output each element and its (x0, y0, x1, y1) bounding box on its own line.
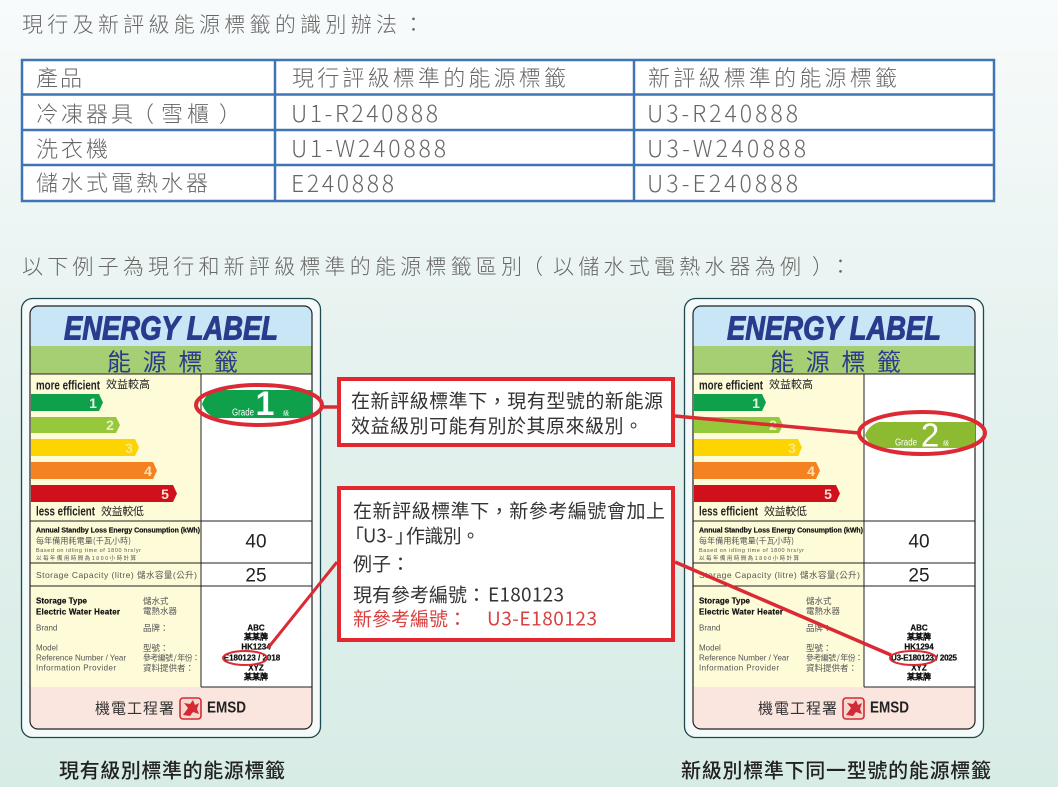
connector lines and highlight ellipses (196, 385, 985, 665)
data rows: 以每年備用時間為1800小時計算 (36, 554, 136, 562)
data rows: ABC (247, 624, 265, 632)
data rows: Reference Number / Year (36, 654, 126, 662)
data rows: Storage Type (36, 596, 88, 606)
data rows: Electric Water Heater (36, 608, 120, 616)
table: label identification: 冷凍器具 (36, 97, 133, 129)
data rows: 品牌： (806, 622, 832, 634)
table: label identification: U1-R240888 (291, 95, 438, 129)
callout: new reference number: 」 (395, 522, 414, 548)
data rows: E180123 / 2018 (224, 654, 281, 662)
data rows: XYZ (911, 664, 927, 672)
title: Chinese: 能源標籤 (107, 342, 238, 378)
grade badge: grade 2: 2 (921, 416, 939, 454)
table: label identification: 產品 (36, 61, 82, 93)
heading: example comparison: （ (522, 251, 543, 281)
title: Chinese: 能源標籤 (770, 342, 901, 378)
data rows: Information Provider (36, 664, 116, 672)
caption: new label: 新級別標準下同一型號的能源標籤 (681, 754, 991, 784)
callout: new reference number: 新參考編號： (353, 604, 467, 632)
data rows: Information Provider (699, 664, 779, 672)
data rows: Based on idling time of 1800 hrs/yr (699, 548, 804, 554)
efficiency scale: 效益較高 (769, 376, 813, 392)
data rows: 以每年備用時間為1800小時計算 (699, 554, 799, 562)
efficiency scale: 3 (125, 440, 133, 456)
data rows: 某某牌 (906, 632, 931, 642)
table: label identification: U3-R240888 (647, 95, 798, 129)
efficiency scale: 2 (769, 417, 777, 433)
table: label identification: 新評級標準的能源標籤 (648, 61, 897, 93)
efficiency scale: 1 (89, 395, 97, 411)
data rows (36, 528, 281, 682)
data rows: 儲水式 (806, 595, 832, 607)
callout: new reference number: E180123 (488, 580, 564, 608)
efficiency scale: less efficient (699, 504, 758, 518)
data rows: 型號： (143, 642, 169, 654)
data rows: 25 (908, 566, 930, 586)
data rows: 25 (245, 566, 267, 586)
data rows: ABC (910, 624, 928, 632)
efficiency scale: 2 (106, 417, 114, 433)
data rows: 40 (245, 532, 267, 552)
efficiency scale: 3 (788, 440, 796, 456)
data rows: 每年備用耗電量(千瓦小時) (36, 536, 131, 546)
callout: new reference number: 「 (345, 522, 364, 548)
title: energy label: ENERGY LABEL (727, 310, 941, 346)
efficiency scale: less efficient (36, 504, 95, 518)
table: label identification: 洗衣機 (36, 132, 108, 164)
footer: EMSD (758, 698, 909, 719)
title: energy label: ENERGY LABEL (64, 310, 278, 346)
table: label identification: 雪櫃 (161, 97, 209, 129)
footer: EMSD (95, 698, 246, 719)
efficiency scale: 5 (824, 486, 832, 502)
efficiency scale: 1 (752, 395, 760, 411)
heading: example comparison (22, 251, 851, 281)
footer: EMSD: EMSD (870, 700, 909, 716)
callout: grade may change (339, 379, 673, 445)
data rows: 每年備用耗電量(千瓦小時) (699, 536, 794, 546)
data rows: HK1294 (904, 642, 934, 652)
data rows: 資料提供者： (806, 662, 857, 674)
efficiency scale (31, 376, 177, 519)
table: label identification: E240888 (291, 165, 394, 199)
data rows: U3-E180123 / 2025 (891, 654, 958, 662)
caption: current label: 現有級別標準的能源標籤 (59, 754, 285, 784)
table: label identification: （ (132, 97, 154, 129)
grade badge: grade 2: 級 (943, 438, 949, 448)
data rows: 參考編號 / 年份： (143, 652, 200, 664)
table: label identification (22, 60, 994, 201)
callout: new reference number: U3-E180123 (487, 604, 597, 632)
data rows: 參考編號 / 年份： (806, 652, 863, 664)
grade badge: grade 1: 1 (256, 385, 274, 423)
callout: new reference number: 現有參考編號： (353, 580, 486, 608)
data rows: Annual Standby Loss Energy Consumption (kWh) (699, 528, 863, 534)
data rows: HK1234 (241, 642, 271, 652)
data rows: Based on idling time of 1800 hrs/yr (36, 548, 141, 554)
data rows: Brand (36, 624, 57, 632)
efficiency scale: 4 (144, 463, 152, 479)
data rows: 電熱水器 (143, 605, 178, 617)
data rows: 40 (908, 532, 930, 552)
efficiency scale: 效益較高 (106, 376, 150, 392)
heading: example comparison: ： (830, 251, 851, 281)
heading: identification method: 現行及新評級能源標籤的識別辦法 (22, 9, 397, 39)
callout: new reference number: 作識別。 (406, 522, 480, 548)
panel: new energy label (684, 298, 984, 738)
data rows: XYZ (248, 664, 264, 672)
data rows (699, 528, 958, 682)
efficiency scale: 5 (161, 486, 169, 502)
efficiency scale: more efficient (699, 378, 763, 392)
table: label identification: U3-W240888 (647, 130, 806, 164)
efficiency scale: 效益較低 (764, 503, 807, 519)
data rows: 資料提供者： (143, 662, 194, 674)
data rows: Storage Capacity (litre) 儲水容量(公升) (699, 570, 860, 580)
grade badge: grade 2: Grade (895, 438, 917, 448)
data rows: Model (699, 644, 721, 652)
table: label identification: 現行評級標準的能源標籤 (292, 61, 566, 93)
data rows: 品牌： (143, 622, 169, 634)
data rows: Model (36, 644, 58, 652)
heading: example comparison: ） (812, 251, 833, 281)
callout: grade may change: 在新評級標準下，現有型號的新能源 (351, 386, 663, 414)
callout: new reference number (339, 488, 673, 640)
footer: EMSD: 機電工程署 (95, 698, 174, 718)
data rows: Brand (699, 624, 720, 632)
grade badge: grade 2 (865, 416, 975, 454)
data rows: 儲水式 (143, 595, 169, 607)
heading: identification method: ： (403, 9, 424, 39)
efficiency scale (694, 376, 840, 519)
callout: grade may change: 效益級別可能有別於其原來級別。 (351, 412, 643, 438)
efficiency scale: 效益較低 (101, 503, 144, 519)
footer: EMSD: EMSD (207, 700, 246, 716)
data rows: Storage Type (699, 596, 751, 606)
grade badge: grade 1: 級 (283, 408, 289, 418)
callout: new reference number: 在新評級標準下，新參考編號會加上 (353, 496, 665, 524)
data rows: 某某牌 (243, 632, 268, 642)
grade badge: grade 1: Grade (232, 408, 254, 418)
data rows: 某某牌 (243, 672, 268, 682)
table: label identification: 儲水式電熱水器 (36, 166, 208, 198)
efficiency scale: more efficient (36, 378, 100, 392)
heading: example comparison: 以儲水式電熱水器為例 (553, 251, 801, 281)
data rows: 型號： (806, 642, 832, 654)
table: label identification: U3-E240888 (647, 165, 798, 199)
table: label identification: U1-W240888 (291, 130, 446, 164)
panel: current energy label (22, 298, 320, 738)
table: label identification: ） (219, 97, 241, 129)
footer: EMSD: 機電工程署 (758, 698, 837, 718)
callout: new reference number: U3- (363, 522, 393, 548)
efficiency scale: 4 (807, 463, 815, 479)
heading: example comparison: 以下例子為現行和新評級標準的能源標籤區別 (22, 251, 522, 281)
data rows: Electric Water Heater (699, 608, 783, 616)
data rows: Annual Standby Loss Energy Consumption (kWh) (36, 528, 200, 534)
data rows: 電熱水器 (806, 605, 841, 617)
data rows: Reference Number / Year (699, 654, 789, 662)
grade badge: grade 1 (202, 385, 312, 423)
callout: new reference number: 例子： (353, 550, 410, 576)
data rows: Storage Capacity (litre) 儲水容量(公升) (36, 570, 197, 580)
data rows: 某某牌 (906, 672, 931, 682)
